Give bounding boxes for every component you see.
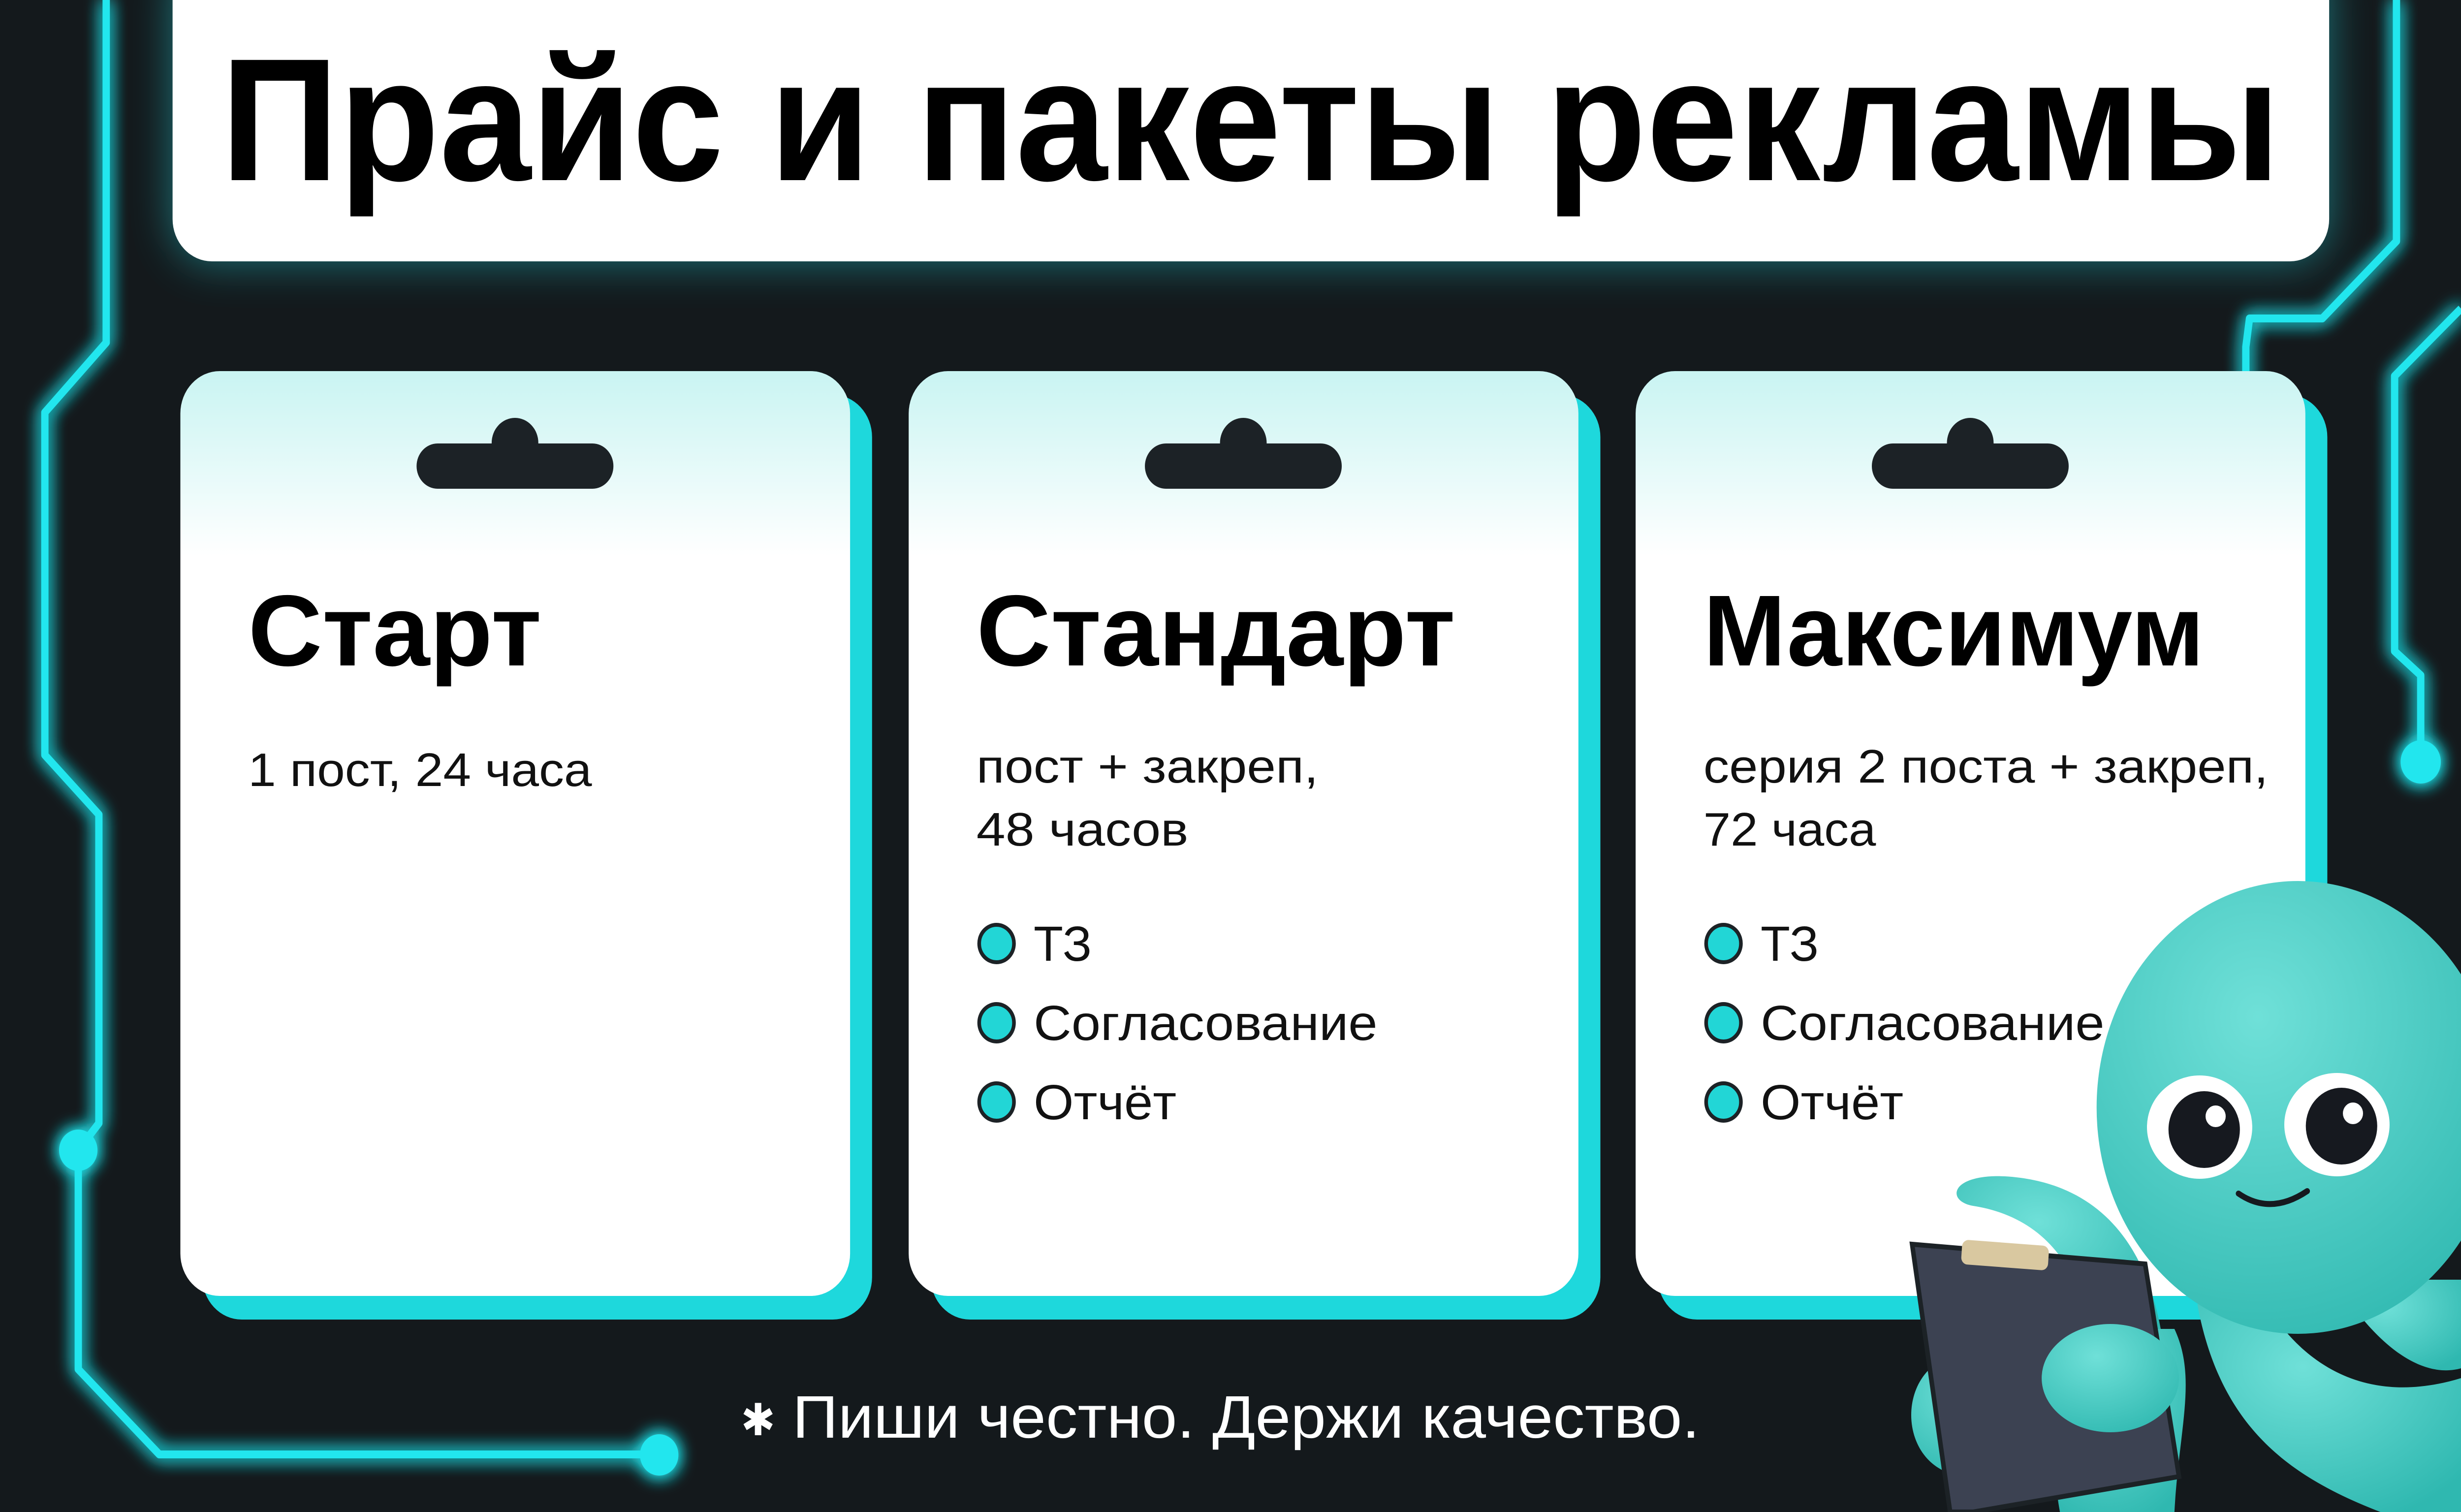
description [977,740,1319,856]
raised tentacle [1956,1176,2161,1329]
card: Стандарт [909,371,1600,1320]
icon: hanger [416,418,613,489]
clipboard [1912,1244,2179,1512]
heading: Максимум [1704,574,2204,687]
bullet list: Отчёт [1034,1075,1176,1130]
icon: octopus mascot [1911,881,2461,1512]
bullet list: ТЗ [1761,917,1819,972]
tentacles bottom [1911,1280,2461,1512]
hand on clipboard [2042,1324,2179,1432]
eyes [2147,1075,2252,1179]
card: Максимум [1636,371,2327,1320]
description: пост + закреп, [977,740,1319,793]
bullet list: Согласование [1034,996,1378,1051]
bullet list: Согласование [1761,996,2104,1051]
circuit lines right [2246,0,2461,780]
head [2097,881,2461,1334]
footer slogan: ✱ [741,1395,775,1445]
card: Старт [180,371,872,1320]
circuit lines left [45,0,675,1472]
icon: hanger [1145,418,1342,489]
smile [2239,1191,2307,1204]
footer slogan: Пиши честно. Держи качество. [792,1383,1700,1450]
heading: Стандарт [977,574,1455,687]
description: 72 часа [1704,803,1876,856]
bullet list [1706,917,2104,1130]
description: серия 2 поста + закреп, [1704,740,2268,793]
description: 48 часов [977,803,1188,856]
title: Прайс и пакеты рекламы [221,22,2281,219]
bullet list [979,917,1378,1130]
icon: hanger [1872,418,2069,489]
heading: Старт [248,574,541,687]
title box [173,0,2329,261]
description: 1 пост, 24 часа [248,743,592,796]
description [1704,740,2268,856]
bullet list: Отчёт [1761,1075,1903,1130]
bullet list: ТЗ [1034,917,1092,972]
